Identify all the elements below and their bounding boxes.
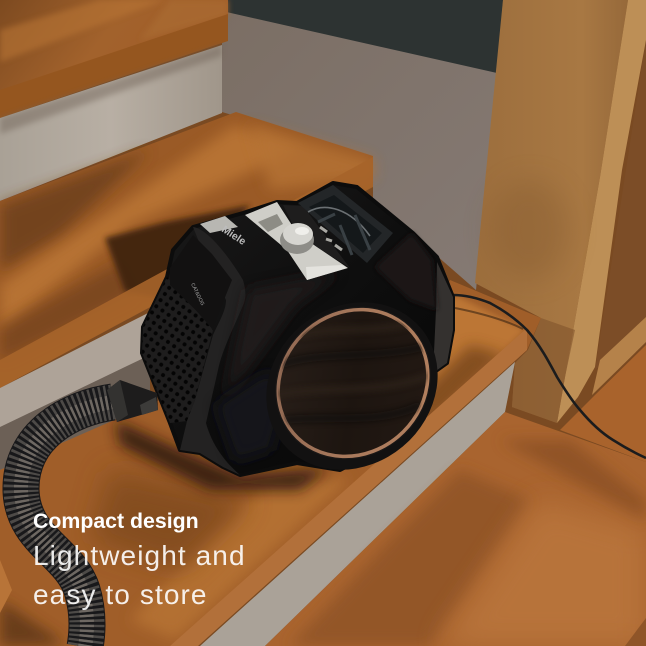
control panel <box>245 202 348 280</box>
handle label: CAT&DOG <box>189 282 205 307</box>
second step tread <box>0 112 373 388</box>
translucent rear housing <box>433 262 453 373</box>
concrete wall <box>222 11 497 290</box>
rear shoulder panel <box>375 233 437 310</box>
mesh panel <box>142 277 213 423</box>
third step riser <box>200 362 515 646</box>
top step riser <box>0 45 222 201</box>
caption body: easy to store <box>33 578 208 610</box>
brand label: Miele <box>219 223 248 248</box>
body highlights <box>225 272 340 400</box>
third step tread <box>0 280 541 646</box>
control dial <box>280 223 314 254</box>
hose connector <box>107 380 158 422</box>
round disc with copper ring <box>266 306 438 470</box>
panel switches <box>283 205 350 268</box>
handle recess <box>170 235 232 327</box>
dark band at top of wall <box>185 0 503 74</box>
second step riser <box>0 312 150 470</box>
vacuum cleaner <box>140 181 455 477</box>
caption text <box>33 509 246 610</box>
power cord <box>453 295 646 458</box>
white tab <box>200 216 238 233</box>
top step tread <box>0 0 228 118</box>
canister window <box>298 185 393 263</box>
caption body <box>33 540 246 610</box>
vacuum shadow <box>115 420 330 490</box>
side band <box>180 227 245 475</box>
caption body: Lightweight and <box>33 540 246 571</box>
caption heading: Compact design <box>33 509 199 533</box>
flexible hose <box>21 402 113 646</box>
wooden post <box>475 0 646 423</box>
floor <box>265 345 646 646</box>
silhouette <box>142 183 453 475</box>
